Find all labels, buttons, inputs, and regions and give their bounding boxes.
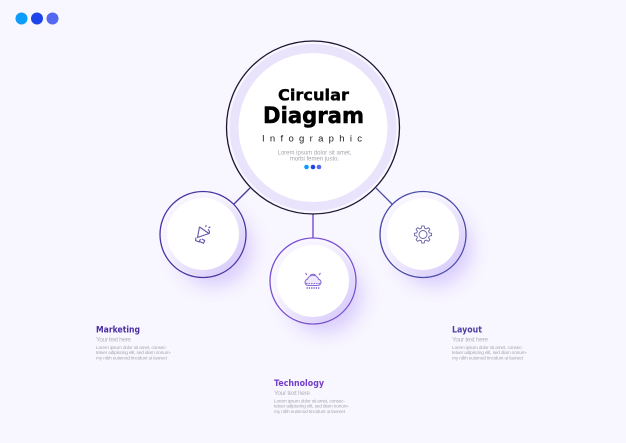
node: layout <box>380 192 472 286</box>
central circle <box>226 41 400 214</box>
text block: technology <box>274 379 349 415</box>
central dots <box>304 165 321 169</box>
text block: layout: my nibh euismod tincidunt ut laoreet <box>452 356 524 362</box>
text block: layout: Layout <box>452 326 482 336</box>
connector: layout <box>376 188 392 204</box>
text block: technology: Lorem ipsum dolor sit amet, consec- <box>274 398 345 404</box>
heading: Circular: Circular <box>278 86 349 104</box>
header dots <box>16 12 58 24</box>
text block: technology: my nibh euismod tincidunt ut laoreet <box>274 409 346 415</box>
text block: layout: Your text here <box>452 336 488 344</box>
central body text <box>277 150 352 162</box>
connector: marketing <box>234 188 250 204</box>
node: technology <box>270 238 362 333</box>
node: marketing <box>160 192 252 286</box>
text block: layout <box>452 326 527 362</box>
central body text: morbi femen justo. <box>290 156 340 162</box>
connector: technology <box>312 214 314 238</box>
text block: technology: Technology <box>274 379 324 389</box>
text block: marketing: Your text here <box>96 336 131 344</box>
text block: marketing: tetuer adipiscing elit, sed diam nonum- <box>96 350 171 356</box>
text block: marketing: Marketing <box>96 326 140 336</box>
icon: gear <box>414 226 432 243</box>
text block: layout: tetuer adipiscing elit, sed diam nonum- <box>452 350 527 356</box>
central body text: Lorem ipsum dolor sit amet, <box>277 150 352 156</box>
icon: megaphone <box>196 225 210 243</box>
text block: marketing: Lorem ipsum dolor sit amet, consec- <box>96 345 167 351</box>
text block: marketing: my nibh euismod tincidunt ut laoreet <box>96 356 168 362</box>
text block: layout: Lorem ipsum dolor sit amet, consec- <box>452 345 523 351</box>
subheading: Infographic: Infographic <box>262 134 362 144</box>
heading: Diagram: Diagram <box>263 104 364 129</box>
text block: marketing <box>96 326 171 362</box>
text block: technology: Your text here <box>274 390 310 397</box>
text block: technology: tetuer adipiscing elit, sed diam nonum- <box>274 404 349 410</box>
icon: cloud <box>305 273 321 288</box>
